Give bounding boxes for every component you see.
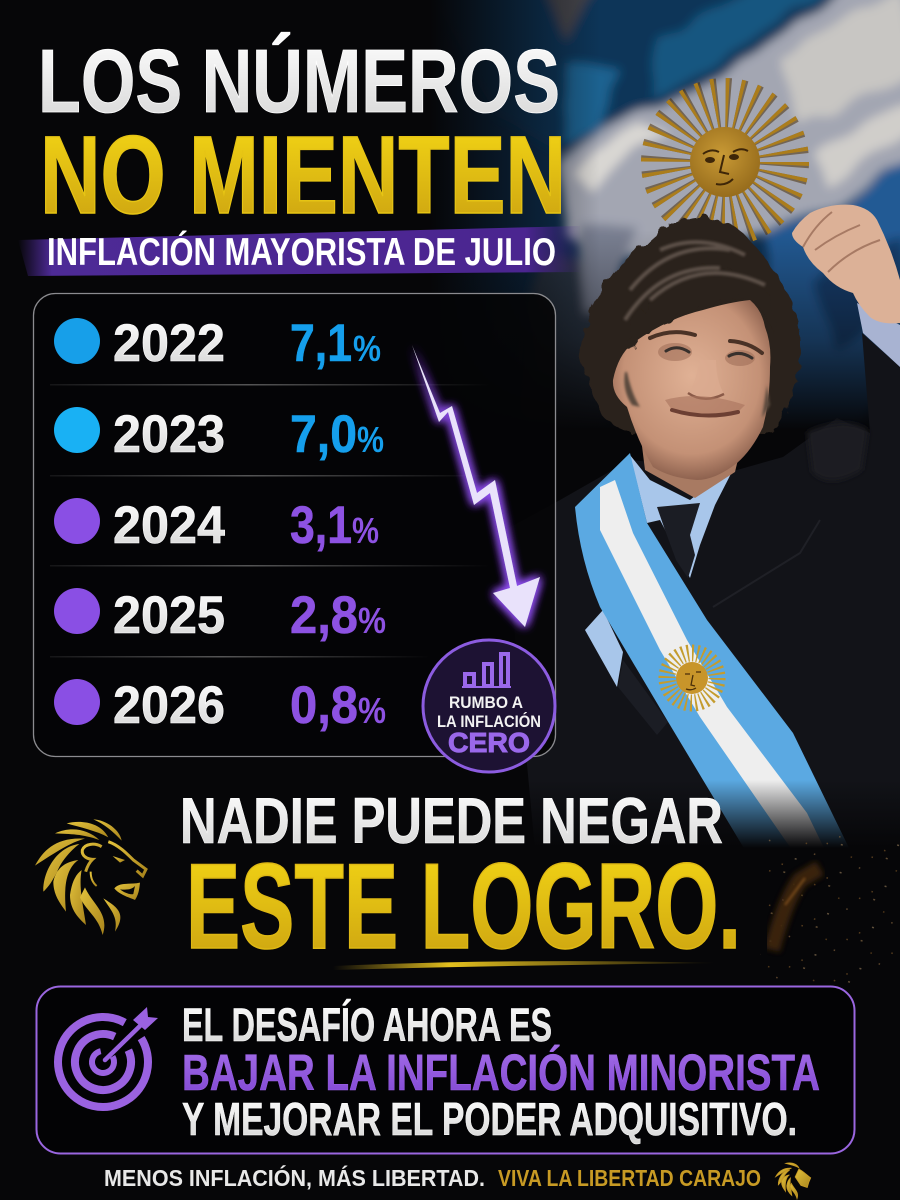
row 2025: 2,8 (290, 586, 358, 645)
city lights (760, 835, 900, 985)
suit fade (500, 780, 900, 852)
badge: rumbo a la inflación cero: RUMBO A (449, 693, 523, 712)
row 2026: % (358, 690, 386, 731)
facial features (624, 332, 770, 418)
shirt cuff (857, 303, 900, 367)
hair (580, 217, 801, 437)
shirt lower (585, 610, 623, 687)
icon: bar chart (462, 654, 511, 687)
headline: nadie puede negar: NADIE PUEDE NEGAR (180, 784, 723, 857)
row 2024: % (352, 510, 379, 551)
suit (505, 333, 900, 850)
row 2026 (54, 676, 386, 735)
row 2023: 2023 (113, 405, 225, 464)
footer (104, 1163, 811, 1199)
suit shoulder highlight (807, 423, 868, 481)
badge: rumbo a la inflación cero: LA INFLACIÓN (437, 712, 541, 731)
title line 1: LOS NÚMEROS (38, 31, 560, 132)
icon: lion (35, 819, 146, 935)
row 2023: % (357, 419, 384, 460)
gold underline (333, 961, 720, 970)
row 2026: 2026 (113, 676, 225, 735)
panel: challenge (36, 986, 854, 1154)
photo background: Argentine flag (420, 0, 900, 430)
row 2023 (54, 405, 384, 464)
face (613, 300, 770, 480)
panel: yearly data table (34, 294, 556, 756)
footer: VIVA LA LIBERTAD CARAJO (498, 1165, 761, 1191)
row 2022: 2022 (113, 314, 225, 373)
suit pocket (713, 520, 820, 607)
row 2026: 0,8 (290, 676, 358, 735)
icon: flag sun (667, 104, 783, 220)
row 2024 (54, 496, 379, 555)
row 2022 (54, 314, 381, 373)
icon: small lion (776, 1163, 811, 1199)
row 2025: 2025 (113, 586, 225, 645)
footer: MENOS INFLACIÓN, MÁS LIBERTAD. (104, 1164, 485, 1191)
hair highlights (625, 242, 765, 320)
badge: rumbo a la inflación cero: CERO (448, 727, 530, 758)
row 2024: 3,1 (290, 496, 352, 555)
subtitle banner: INFLACIÓN MAYORISTA DE JULIO (47, 230, 556, 274)
photo: man with presidential sash (500, 205, 900, 852)
row 2022: % (353, 328, 381, 369)
arrow: falling zigzag (412, 345, 540, 627)
badge: rumbo a la inflación cero (423, 640, 555, 772)
tie knot (657, 503, 700, 578)
title line 2: NO MIENTEN (40, 114, 566, 237)
neck (640, 430, 745, 498)
challenge line 1: EL DESAFÍO AHORA ES (182, 998, 552, 1051)
raised fist (792, 205, 900, 323)
icon: target with arrow (41, 1000, 165, 1124)
row 2025: % (358, 600, 386, 641)
icon: sash sun (667, 653, 717, 703)
title (38, 31, 566, 237)
fringe (625, 266, 775, 350)
presidential sash (575, 453, 850, 850)
row 2024: 2024 (113, 496, 225, 555)
shirt collar (630, 455, 737, 578)
row 2022: 7,1 (290, 314, 352, 373)
tie lower (618, 660, 668, 735)
row 2025 (54, 586, 386, 645)
row 2023: 7,0 (290, 405, 357, 464)
